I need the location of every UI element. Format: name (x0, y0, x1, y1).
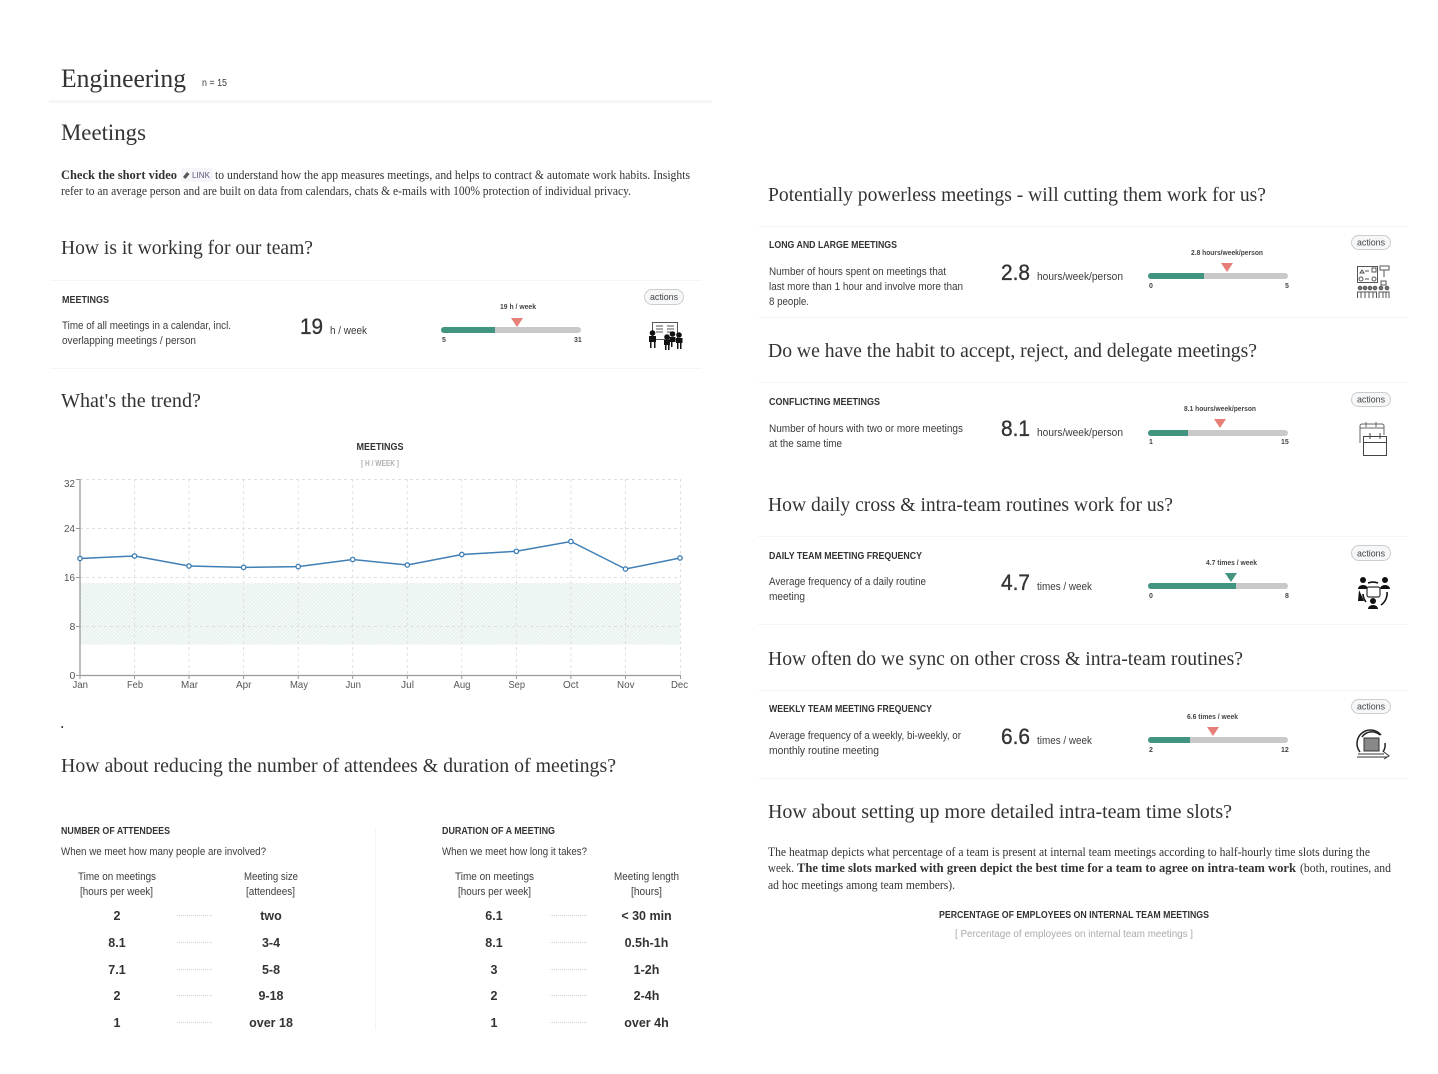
actions button: actions (1357, 238, 1385, 248)
panel: weekly team meeting frequency: Average frequency of a weekly, bi-weekly, or (769, 730, 961, 742)
actions button (644, 290, 684, 304)
icon: flowchart audience (1358, 266, 1389, 298)
table: duration of a meeting: 1 (491, 1016, 498, 1030)
table: duration of a meeting: 1-2h (634, 963, 659, 977)
panel: weekly team meeting frequency: times / week (1037, 735, 1092, 747)
panel: conflicting meetings: at the same time (769, 438, 842, 450)
heading: how is it working: How is it working for our team? (61, 237, 313, 259)
panel: meetings metric: MEETINGS (62, 295, 109, 306)
table: number of attendees: [attendees] (246, 886, 295, 898)
heatmap title: PERCENTAGE OF EMPLOYEES ON INTERNAL TEAM MEETINGS (939, 910, 1209, 921)
chart: meetings line chart: Apr (236, 679, 252, 691)
scale bar (1148, 573, 1289, 600)
scale bar: 0 (1149, 283, 1153, 290)
table: number of attendees: two (260, 909, 282, 923)
table: number of attendees: 5-8 (262, 963, 280, 977)
panel: weekly team meeting frequency (758, 690, 1408, 779)
scale bar: 5 (442, 337, 446, 344)
table: number of attendees: 2 (114, 909, 121, 923)
panel: long and large meetings: hours/week/person (1037, 271, 1123, 283)
heading: meetings: Meetings (61, 120, 146, 145)
panel: daily team meeting frequency: 4.7 times / week (1206, 560, 1257, 567)
scale bar: 8 (1285, 593, 1289, 600)
panel: daily team meeting frequency: meeting (769, 591, 805, 603)
scale bar (441, 318, 582, 344)
intro paragraph: LINK (192, 171, 211, 180)
heatmap description: week. (768, 861, 794, 875)
panel: long and large meetings: 8 people. (769, 296, 809, 308)
panel: weekly team meeting frequency: WEEKLY TEAM MEETING FREQUENCY (769, 704, 932, 715)
panel: meetings metric: 19 (300, 314, 323, 339)
panel: conflicting meetings: 8.1 hours/week/person (1184, 406, 1256, 413)
chart: meetings line chart: Oct (563, 679, 579, 691)
intro paragraph: to understand how the app measures meetings, and helps to contract & automate work habits. Insights (215, 168, 690, 182)
actions button (1352, 392, 1390, 406)
scale bar: 5 (1285, 283, 1289, 290)
panel: meetings metric: overlapping meetings / person (62, 335, 196, 347)
table: number of attendees: 3-4 (262, 936, 280, 950)
actions button (1352, 546, 1390, 560)
panel: weekly team meeting frequency: monthly routine meeting (769, 745, 879, 757)
table: duration of a meeting: When we meet how long it takes? (442, 846, 587, 858)
heatmap description (768, 845, 1392, 892)
table: duration of a meeting: Meeting length (614, 871, 679, 883)
panel: weekly team meeting frequency: 6.6 (1001, 724, 1030, 749)
actions button: actions (1357, 702, 1385, 712)
panel: conflicting meetings: CONFLICTING MEETINGS (769, 397, 880, 408)
panel: daily team meeting frequency: 4.7 (1001, 570, 1030, 595)
table: duration of a meeting: DURATION OF A MEETING (442, 826, 555, 837)
table: number of attendees: Meeting size (244, 871, 298, 883)
intro paragraph: refer to an average person and are built on data from calendars, chats & e-mails with 100% protection of individual privacy. (61, 184, 631, 198)
scale bar: 1 (1149, 439, 1153, 446)
chart: meetings line chart: Sep (508, 679, 525, 691)
data line (78, 539, 682, 571)
table: duration of a meeting: 3 (491, 963, 498, 977)
table: duration of a meeting: over 4h (624, 1016, 669, 1030)
panel: daily team meeting frequency: times / week (1037, 581, 1092, 593)
chart: meetings line chart: May (290, 679, 309, 691)
chart: meetings line chart: Feb (127, 679, 143, 691)
heading: powerless meetings: Potentially powerless meetings - will cutting them work for us? (768, 184, 1266, 206)
heading: trend: What's the trend? (61, 390, 201, 412)
actions button: actions (1357, 394, 1385, 406)
chart: meetings line chart: MEETINGS (356, 442, 404, 453)
chart: meetings line chart: 8 (70, 621, 76, 633)
heading: reducing attendees: How about reducing the number of attendees & duration of meetings? (61, 755, 616, 777)
chart: meetings line chart: 24 (64, 523, 75, 535)
panel: daily team meeting frequency (758, 536, 1408, 625)
table: duration of a meeting: 2 (491, 989, 498, 1003)
table: duration of a meeting: 6.1 (485, 909, 503, 923)
panel: daily team meeting frequency: Average frequency of a daily routine (769, 576, 926, 588)
table: number of attendees: 7.1 (108, 963, 126, 977)
scale bar: 31 (574, 337, 582, 344)
panel: long and large meetings: last more than 1 hour and involve more than (769, 281, 963, 293)
table: number of attendees: over 18 (249, 1016, 293, 1030)
panel: meetings metric: Time of all meetings in a calendar, incl. (62, 320, 231, 332)
panel: long and large meetings: 2.8 hours/week/person (1191, 250, 1263, 257)
scale bar: 15 (1281, 439, 1289, 446)
table: duration of a meeting: [hours per week] (458, 886, 531, 898)
icon: overlapping calendars (1360, 422, 1386, 456)
table: number of attendees: 1 (114, 1016, 121, 1030)
table: duration of a meeting: 0.5h-1h (625, 936, 668, 950)
actions button: actions (650, 292, 678, 303)
scale bar (1148, 727, 1289, 754)
heading: sync routines: How often do we sync on other cross & intra-team routines? (768, 648, 1243, 670)
table: duration of a meeting: [hours] (631, 886, 662, 898)
title: Engineering (61, 64, 186, 93)
panel: meetings metric: 19 h / week (500, 304, 536, 311)
panel: conflicting meetings: hours/week/person (1037, 427, 1123, 439)
heatmap description: ad hoc meetings among team members). (768, 878, 955, 892)
scale bar: 2 (1149, 747, 1153, 754)
table: number of attendees: 2 (114, 989, 121, 1003)
heatmap description: The heatmap depicts what percentage of a team is present at internal team meetings according to half-hourly time slots during the (768, 845, 1370, 859)
panel: conflicting meetings: Number of hours with two or more meetings (769, 423, 963, 435)
chart: meetings line chart: [ H / WEEK ] (361, 459, 399, 468)
chart: meetings line chart: Jan (72, 679, 88, 691)
table: duration of a meeting: 8.1 (485, 936, 503, 950)
scale bar (1148, 419, 1289, 446)
table: number of attendees: When we meet how many people are involved? (61, 846, 266, 858)
table: number of attendees: 9-18 (258, 989, 284, 1003)
panel: daily team meeting frequency: DAILY TEAM MEETING FREQUENCY (769, 551, 922, 562)
table: duration of a meeting: Time on meetings (455, 871, 534, 883)
heatmap description: (both, routines, and (1300, 861, 1392, 875)
panel: weekly team meeting frequency: 6.6 times / week (1187, 714, 1238, 721)
actions button (1352, 236, 1390, 250)
chart: meetings line chart: Jun (346, 679, 361, 691)
panel: long and large meetings: LONG AND LARGE MEETINGS (769, 240, 897, 251)
panel: conflicting meetings (758, 382, 1408, 456)
heatmap subtitle: [ Percentage of employees on internal team meetings ] (955, 928, 1193, 940)
actions button: actions (1357, 548, 1385, 560)
panel: long and large meetings: 2.8 (1001, 260, 1030, 285)
icon: team circle (1358, 577, 1390, 609)
chart: meetings line chart: 16 (64, 572, 75, 584)
table: number of attendees: [hours per week] (80, 886, 153, 898)
intro paragraph: Check the short video (61, 168, 177, 182)
table: number of attendees (61, 826, 298, 1030)
heading: daily routines: How daily cross & intra-team routines work for us? (768, 494, 1173, 516)
table: number of attendees: 8.1 (108, 936, 126, 950)
scale bar: 12 (1281, 747, 1289, 754)
heading: accept reject delegate: Do we have the habit to accept, reject, and delegate meetings? (768, 340, 1257, 362)
table: number of attendees: Time on meetings (78, 871, 156, 883)
panel: long and large meetings: Number of hours spent on meetings that (769, 266, 946, 278)
actions button (1352, 700, 1390, 714)
intro paragraph (61, 168, 690, 198)
chart: meetings line chart: Jul (401, 679, 414, 691)
chart: meetings line chart: Nov (617, 679, 635, 691)
heading: time slots: How about setting up more detailed intra-team time slots? (768, 801, 1232, 823)
panel: long and large meetings (758, 226, 1408, 318)
icon: presentation audience (649, 322, 682, 350)
chart: meetings line chart: 0 (70, 670, 76, 682)
chart: meetings line chart: Mar (181, 679, 198, 691)
icon: recurring calendar (1357, 730, 1389, 759)
chart: meetings line chart (64, 442, 688, 691)
panel: meetings metric: h / week (330, 325, 367, 337)
panel: meetings metric (50, 280, 702, 369)
chart: meetings line chart: 32 (64, 478, 75, 490)
heatmap description: The time slots marked with green depict the best time for a team to agree on intra-team work (797, 861, 1296, 875)
table: duration of a meeting: < 30 min (621, 909, 672, 923)
scale bar (1148, 263, 1289, 290)
table: number of attendees: NUMBER OF ATTENDEES (61, 826, 170, 837)
panel: conflicting meetings: 8.1 (1001, 416, 1030, 441)
table: duration of a meeting: 2-4h (634, 989, 659, 1003)
table: duration of a meeting (442, 826, 679, 1030)
scale bar: 0 (1149, 593, 1153, 600)
sample size: n = 15 (202, 78, 227, 89)
chart: meetings line chart: Dec (671, 679, 688, 691)
chart: meetings line chart: Aug (454, 679, 471, 691)
